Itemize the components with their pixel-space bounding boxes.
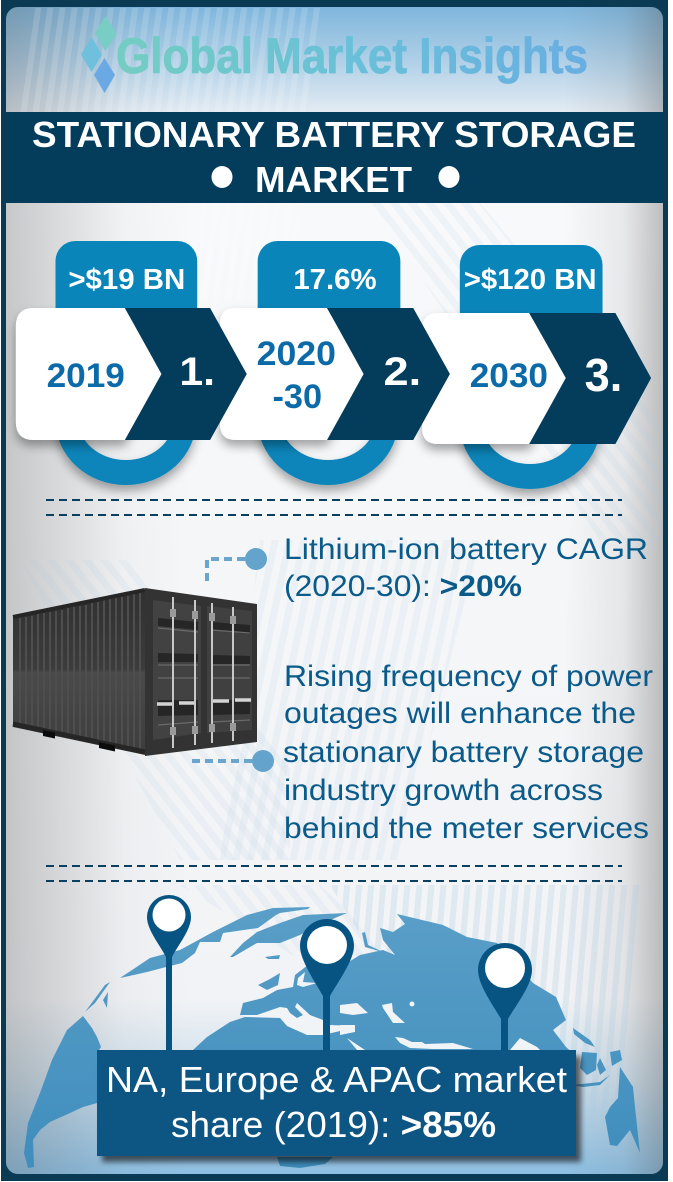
callout text: power outages: outages will enhance the bbox=[284, 697, 636, 730]
timeline step 1: 2019: 2019 bbox=[47, 357, 125, 395]
map pin 1 bbox=[147, 895, 191, 1052]
title line 1: STATIONARY BATTERY STORAGE bbox=[32, 114, 636, 155]
timeline step 1: 2019 bbox=[16, 241, 247, 485]
callout text: power outages: industry growth across bbox=[284, 774, 603, 807]
timeline step 3: 2030: 2030 bbox=[470, 357, 548, 395]
callout connector: power outages bbox=[190, 750, 274, 772]
market share callout box: share (2019): >85% bbox=[171, 1104, 496, 1145]
title line 2 bbox=[212, 159, 460, 200]
title banner bbox=[6, 112, 663, 203]
title line 2: MARKET bbox=[255, 159, 412, 200]
South America bbox=[24, 1016, 101, 1168]
Siberian island sliver bbox=[362, 932, 383, 952]
timeline step 3: 2030: >$120 BN bbox=[464, 264, 597, 296]
callout text: power outages bbox=[283, 660, 653, 845]
logo wordmark: Global Market Insights bbox=[116, 28, 588, 84]
icon: logo diamonds bbox=[81, 16, 116, 93]
timeline step 2: 2020-30 bbox=[220, 241, 450, 485]
callout text: lithium-ion CAGR: (2020-30): >20% bbox=[284, 570, 522, 603]
timeline step 3: 2030: 3. bbox=[585, 350, 622, 401]
below-box landmass bbox=[277, 1157, 333, 1168]
timeline step 1: 2019: 1. bbox=[179, 350, 215, 394]
map pin 2 bbox=[300, 919, 354, 1052]
callout text: lithium-ion CAGR bbox=[284, 533, 648, 603]
callout text: lithium-ion CAGR: Lithium-ion battery CAGR bbox=[284, 533, 648, 566]
Indonesia and Pacific islands bbox=[580, 1052, 597, 1075]
Central America slivers bbox=[85, 982, 110, 1012]
logo: Global Market Insights bbox=[81, 16, 588, 93]
callout text: power outages: Rising frequency of power bbox=[284, 660, 653, 693]
map seas bbox=[240, 972, 540, 1050]
market share callout box bbox=[97, 1050, 576, 1156]
timeline step 3: 2030 bbox=[422, 245, 651, 489]
timeline step 2: 2020-30: 2. bbox=[384, 350, 421, 394]
timeline step 2: 2020-30: -30 bbox=[273, 378, 322, 416]
Arctic arc 1 bbox=[120, 907, 310, 978]
world globe map bbox=[24, 907, 640, 1168]
timeline step 2: 2020-30: 2020 bbox=[257, 335, 336, 373]
callout connector: lithium-ion bbox=[207, 548, 267, 585]
container doors bbox=[153, 597, 252, 748]
Arctic arc 2 bbox=[230, 913, 347, 957]
timeline step 1: 2019: >$19 BN bbox=[68, 264, 185, 296]
Iceland and UK bbox=[265, 955, 280, 959]
Eurasia and Africa bbox=[193, 914, 576, 1056]
timeline step 2: 2020-30: 17.6% bbox=[293, 264, 377, 296]
map pin 3 bbox=[478, 943, 532, 1052]
market share callout box: NA, Europe & APAC market bbox=[106, 1059, 567, 1100]
callout text: power outages: behind the meter services bbox=[284, 812, 649, 845]
icon: shipping container bbox=[13, 588, 257, 756]
callout text: power outages: stationary battery storage bbox=[283, 736, 644, 769]
Australia bbox=[605, 1067, 640, 1153]
